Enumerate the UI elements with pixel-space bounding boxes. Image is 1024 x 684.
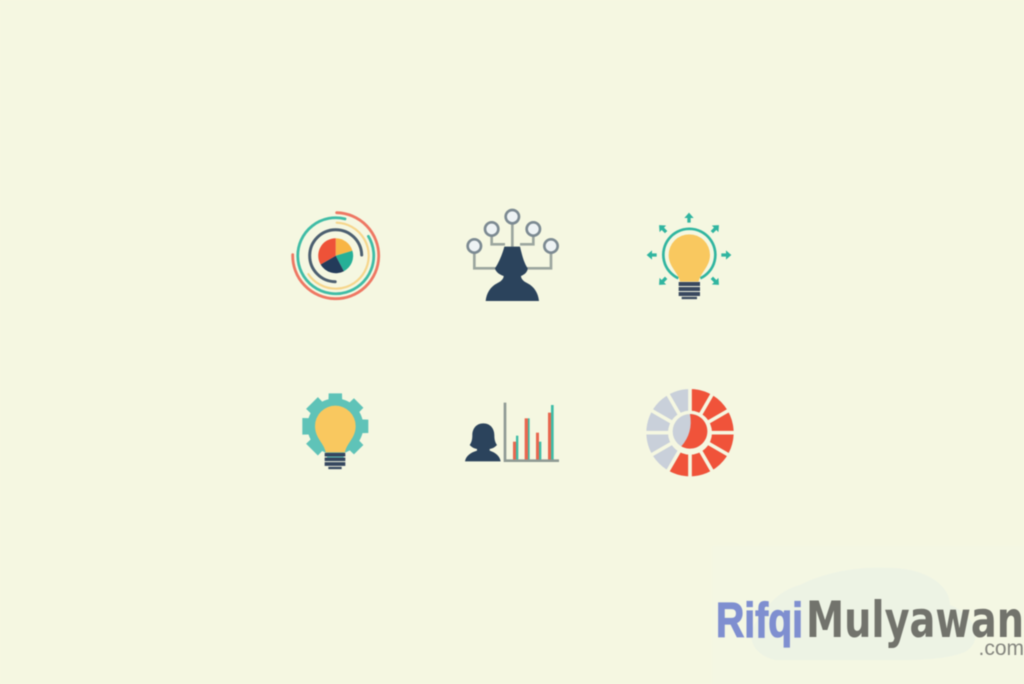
icon: head silhouette with connected nodes (468, 210, 558, 301)
icon: light bulb with gear (302, 393, 368, 468)
bar chart (505, 403, 559, 461)
logo text: Rifqi (716, 594, 803, 648)
icon: concentric rings with pie chart (293, 213, 379, 299)
icon: segmented progress dial (644, 387, 736, 479)
watermark cloud (751, 568, 976, 660)
icon: person beside bar chart (465, 403, 559, 461)
person silhouette (465, 423, 501, 461)
watermark backdrop (712, 546, 1024, 684)
icon: light bulb with arrows (647, 213, 731, 298)
watermark: logo (712, 546, 1024, 684)
logo domain: .com (978, 637, 1024, 660)
